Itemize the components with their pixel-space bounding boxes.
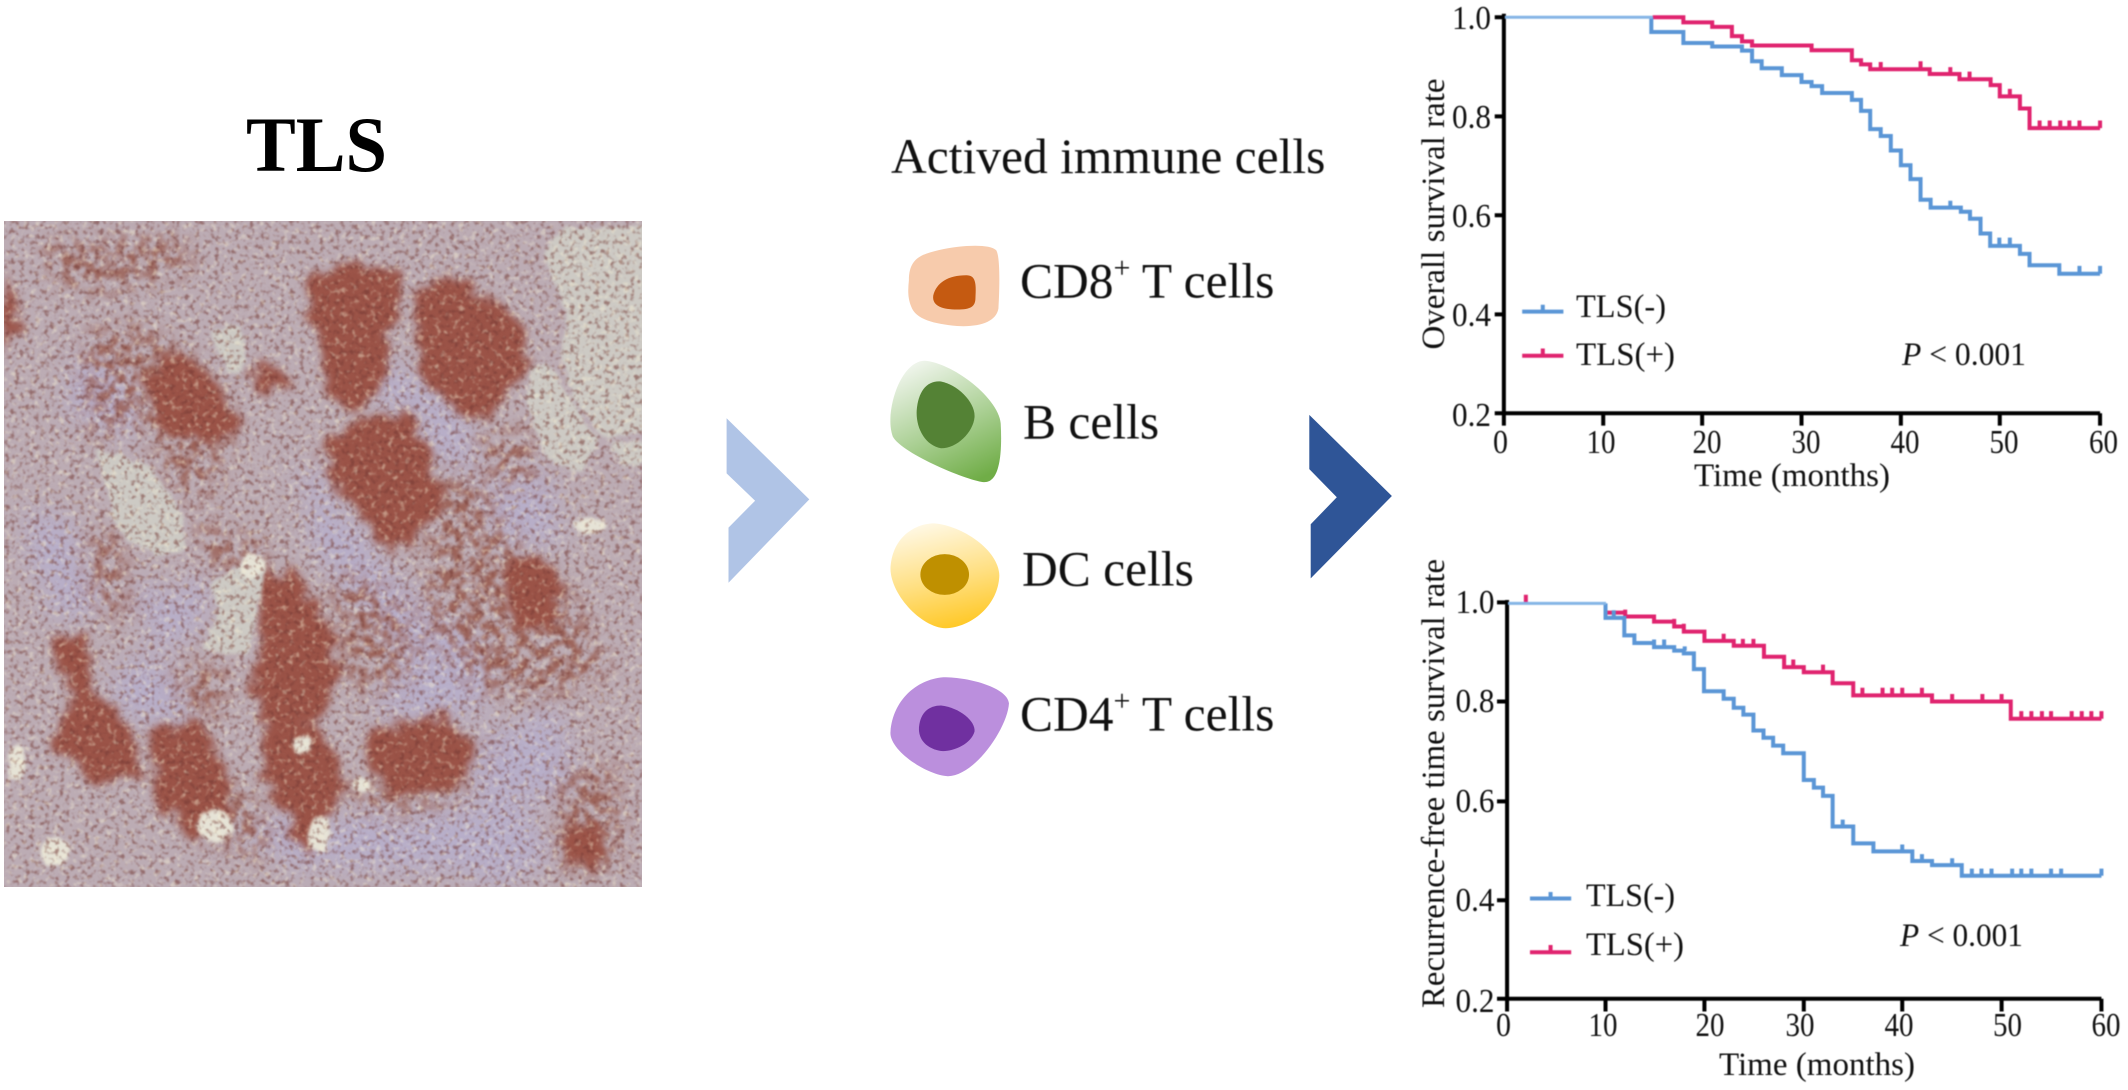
y tick labels: 0.8 <box>1452 99 1491 136</box>
scattered brown infiltrate <box>42 236 623 870</box>
cell: DC cells: DC cells <box>1022 542 1194 596</box>
curve: TLS(-) <box>1606 603 2101 876</box>
curve start: shared plateau <box>1508 602 1606 605</box>
y tick labels: 0.2 <box>1452 397 1491 434</box>
x tick labels: 50 <box>1990 424 2018 461</box>
curve: TLS(-) <box>1651 17 2100 274</box>
lilac stroma areas <box>25 343 568 879</box>
p value: P < 0.001 <box>1901 337 2026 373</box>
cell: B cells <box>890 361 1159 482</box>
x tick labels: 30 <box>1786 1007 1814 1044</box>
cell: B cells: B cells <box>1023 394 1159 450</box>
curve: TLS(+) <box>1526 595 2101 719</box>
microscopic grain <box>4 221 642 887</box>
y tick labels: 0.4 <box>1456 882 1494 919</box>
legend line: TLS(-) <box>1522 305 1563 312</box>
axes and curves <box>1497 595 2101 1011</box>
x tick labels: 20 <box>1692 424 1722 461</box>
cell: CD4+ T cells: CD4 <box>1020 686 1114 742</box>
y axis title: Overall survival rate <box>1416 78 1452 350</box>
cell: DC cells <box>890 523 1194 628</box>
curve: TLS(+) <box>1653 17 2100 128</box>
dense brown lymphoid aggregates <box>4 265 600 867</box>
y tick labels: 1.0 <box>1452 0 1491 37</box>
cell: CD4+ T cells <box>890 677 1274 776</box>
x tick labels: 20 <box>1696 1007 1724 1044</box>
arrow: light blue chevron <box>727 418 809 583</box>
x tick labels: 0 <box>1496 1007 1511 1044</box>
x tick labels <box>1496 1007 2120 1044</box>
cell: CD8+ T cells: T cells <box>1130 254 1274 308</box>
legend label: TLS(+): TLS(+) <box>1586 927 1684 963</box>
cell: CD8+ T cells <box>908 246 1274 326</box>
y tick labels <box>1452 0 1491 434</box>
legend line: TLS(+) <box>1530 945 1571 952</box>
x tick labels: 60 <box>2089 424 2118 461</box>
x tick labels: 30 <box>1792 424 1820 461</box>
small white lumens <box>8 519 606 865</box>
y tick labels: 0.4 <box>1452 297 1491 334</box>
legend line: TLS(+) <box>1522 349 1563 356</box>
x tick labels: 60 <box>2092 1007 2120 1044</box>
heading: Actived immune cells: Actived immune cells <box>891 129 1325 184</box>
panel: immune cell list <box>890 246 1274 776</box>
p value: P < 0.001 <box>1899 918 2023 954</box>
curve start: shared plateau <box>1505 16 1653 19</box>
legend label: TLS(-): TLS(-) <box>1576 289 1666 325</box>
x tick labels: 10 <box>1588 1007 1618 1044</box>
cell: CD8+ T cells: + <box>1114 252 1130 284</box>
axes and curves <box>1495 14 2100 426</box>
title: TLS: TLS <box>246 101 387 188</box>
y tick labels <box>1456 584 1494 1020</box>
chart: overall survival <box>1416 0 2118 494</box>
cell: CD4+ T cells: T cells <box>1130 686 1274 742</box>
pale tissue voids <box>97 227 648 655</box>
x tick labels <box>1493 424 2118 461</box>
y tick labels: 0.6 <box>1452 198 1491 235</box>
y tick labels: 0.2 <box>1456 983 1494 1020</box>
x tick labels: 40 <box>1884 1007 1914 1044</box>
x tick labels: 40 <box>1890 424 1920 461</box>
cell: CD4+ T cells: + <box>1114 684 1130 718</box>
x axis title: Time (months) <box>1694 458 1890 494</box>
legend label: TLS(-): TLS(-) <box>1586 878 1675 914</box>
arrow: dark blue chevron <box>1309 415 1392 578</box>
x tick labels: 0 <box>1493 424 1508 461</box>
y tick labels: 0.6 <box>1456 783 1494 820</box>
legend line: TLS(-) <box>1530 892 1571 899</box>
panel: tissue micrograph <box>4 221 648 887</box>
y axis title: Recurrence-free time survival rate <box>1416 559 1452 1008</box>
x tick labels: 10 <box>1586 424 1616 461</box>
x tick labels: 50 <box>1993 1007 2022 1044</box>
legend label: TLS(+): TLS(+) <box>1576 337 1675 373</box>
x axis title: Time (months) <box>1719 1047 1915 1083</box>
y tick labels: 1.0 <box>1456 584 1494 621</box>
y tick labels: 0.8 <box>1456 683 1494 720</box>
chart: recurrence-free survival <box>1416 559 2120 1083</box>
cell: CD8+ T cells: CD8 <box>1020 254 1114 308</box>
